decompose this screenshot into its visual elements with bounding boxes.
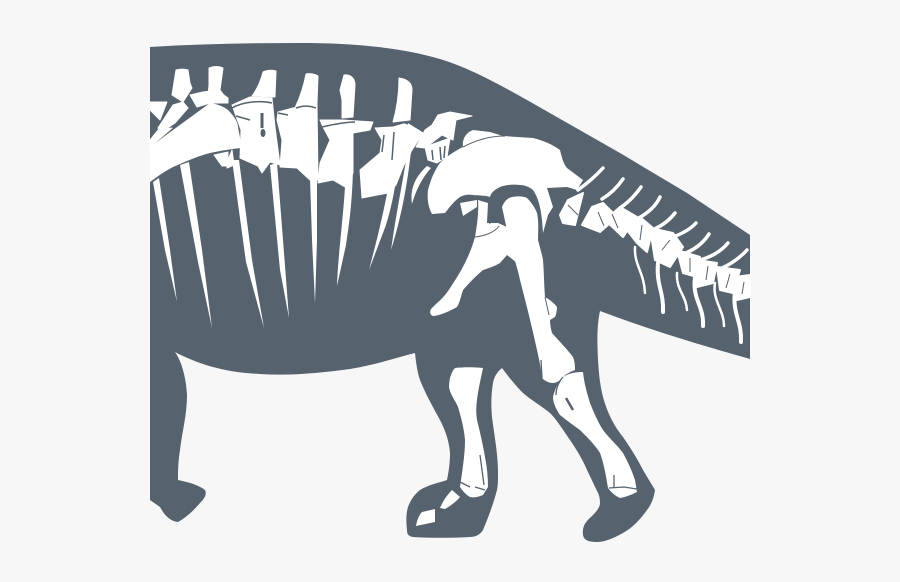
lower leg detail lines (460, 360, 637, 490)
small hip bone (460, 200, 477, 216)
tail neural spines (578, 168, 747, 269)
body silhouette (150, 43, 750, 542)
neural spines: back (172, 66, 412, 122)
tail vertebrae (560, 193, 750, 300)
bone detail lines (232, 102, 445, 160)
front lower leg bone (449, 367, 488, 497)
front foot bones (416, 490, 460, 526)
scapula (150, 103, 242, 182)
femur (502, 196, 575, 383)
tail chevrons (635, 247, 741, 342)
rear lower leg bone (553, 372, 637, 498)
tail vertebra detail (568, 205, 744, 294)
ribs (153, 136, 431, 328)
ischium and pubis (430, 200, 517, 316)
hip bone detail lines (463, 136, 549, 315)
ilium (428, 130, 583, 233)
dorsal vertebra plates (150, 90, 472, 198)
